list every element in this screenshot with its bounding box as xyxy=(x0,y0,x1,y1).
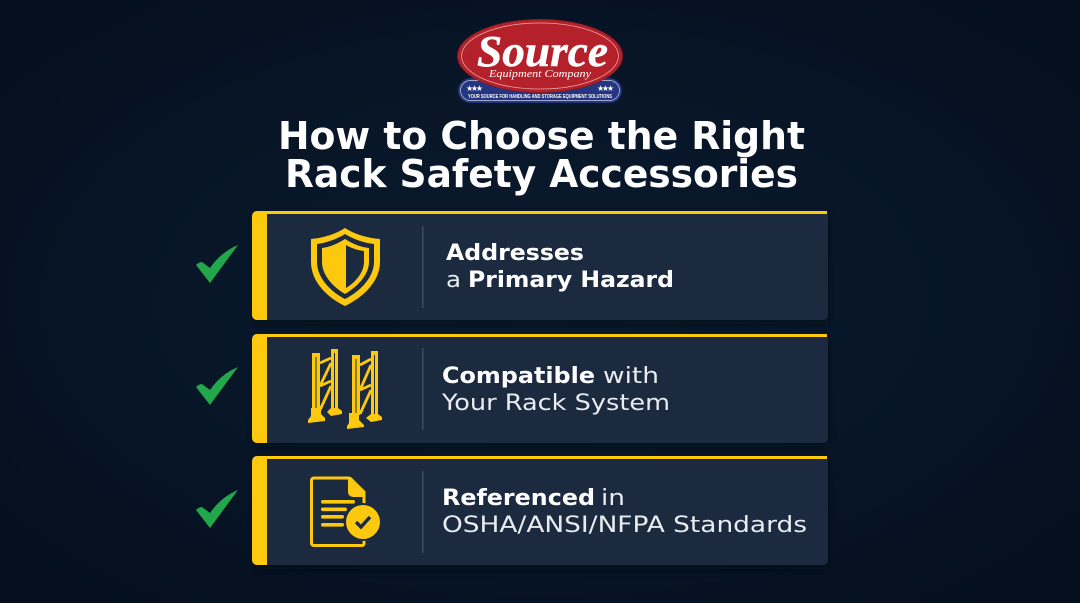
title xyxy=(278,114,805,196)
icon: rack uprights xyxy=(308,349,382,429)
logo: Source Equipment Company: ★★★ xyxy=(466,84,483,93)
text: referenced in OSHA/ANSI/NFPA standards xyxy=(442,486,807,538)
text: compatible with your rack system: with xyxy=(603,364,659,389)
icon: green check 3 xyxy=(196,490,238,528)
text: addresses a primary hazard: Addresses xyxy=(446,241,584,266)
title: How to Choose the Right xyxy=(278,114,805,158)
icon: green check 2 xyxy=(196,367,238,405)
text: referenced in OSHA/ANSI/NFPA standards: Referenced xyxy=(442,486,595,511)
logo: Source Equipment Company: ★★★ xyxy=(597,84,614,93)
text: addresses a primary hazard: Primary Hazard xyxy=(468,268,674,293)
text: addresses a primary hazard xyxy=(446,241,674,293)
panel: compatible with your rack system xyxy=(252,334,828,447)
panel: addresses a primary hazard xyxy=(252,211,828,324)
text: referenced in OSHA/ANSI/NFPA standards: in xyxy=(601,486,625,511)
title: Rack Safety Accessories xyxy=(285,152,798,196)
text: referenced in OSHA/ANSI/NFPA standards: OSHA/ANSI/NFPA Standards xyxy=(442,513,807,538)
text: addresses a primary hazard: a xyxy=(446,268,461,293)
icon: shield xyxy=(311,228,380,306)
text: compatible with your rack system: Compatible xyxy=(442,364,595,389)
icon: document with check xyxy=(312,477,382,546)
logo: Source Equipment Company xyxy=(458,20,622,103)
panel: referenced in OSHA/ANSI/NFPA standards xyxy=(252,456,828,569)
text: compatible with your rack system xyxy=(441,364,670,416)
text: compatible with your rack system: Your Rack System xyxy=(441,391,670,416)
logo: Source Equipment Company: Equipment Company xyxy=(488,69,591,80)
icon: green check 1 xyxy=(196,245,238,283)
logo: Source Equipment Company: Source xyxy=(477,27,608,76)
logo: Source Equipment Company: YOUR SOURCE FOR HANDLING AND STORAGE EQUIPMENT SOLUTIONS xyxy=(468,94,613,100)
